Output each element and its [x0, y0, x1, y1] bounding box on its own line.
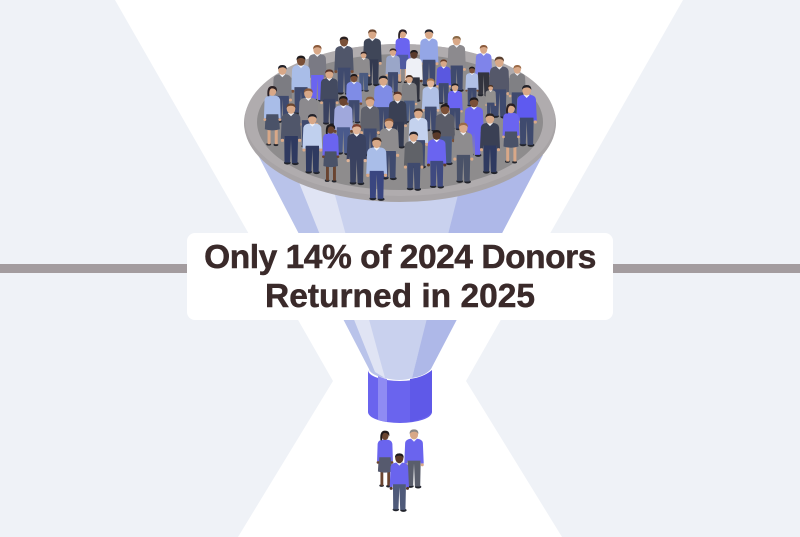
small group of returning donors — [377, 429, 424, 512]
funnel — [244, 44, 556, 423]
crowd of people in funnel — [263, 29, 537, 201]
divider bar: left — [0, 264, 190, 273]
title text: Returned in 2025 — [265, 278, 535, 315]
funnel spout — [368, 370, 432, 423]
title text: Only 14% of 2024 Donors — [204, 239, 596, 276]
funnel rim — [244, 44, 556, 202]
divider bar: right — [610, 264, 800, 273]
title card — [187, 233, 613, 320]
background panel: left — [0, 0, 333, 537]
funnel cone — [258, 155, 543, 380]
background panel: right — [466, 0, 800, 537]
